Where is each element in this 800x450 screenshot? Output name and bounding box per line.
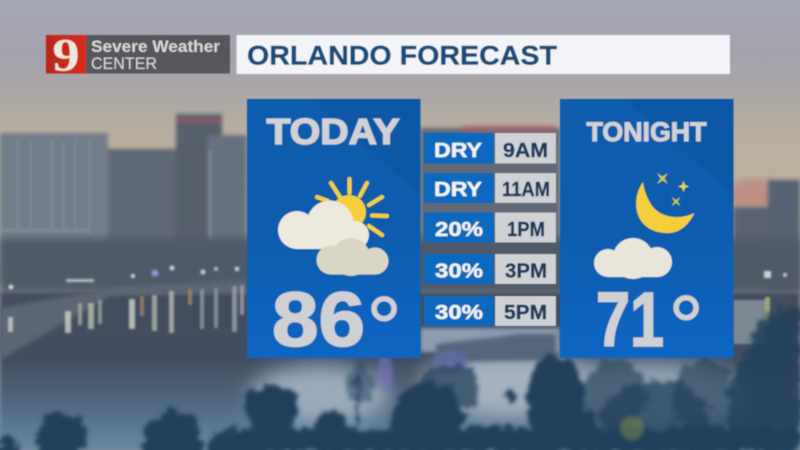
row: 5PM: 30%	[435, 301, 483, 324]
row: 5PM	[424, 296, 556, 326]
row: 11AM	[424, 173, 556, 203]
row: 3PM: 30%	[435, 260, 483, 282]
row: 3PM	[424, 254, 556, 284]
row: 9AM: DRY	[434, 139, 482, 162]
logo text	[91, 37, 220, 73]
icon: night cloud	[594, 238, 672, 279]
temperature: 86 degrees	[272, 277, 402, 377]
building window columns	[0, 140, 212, 240]
row: 9AM: 9AM	[503, 139, 548, 162]
icon: partly cloudy sun	[278, 179, 388, 276]
icon: crescent moon and stars	[636, 173, 694, 233]
row: 11AM: 11AM	[502, 178, 550, 201]
shore lights	[8, 266, 787, 290]
buildings	[0, 114, 800, 290]
temperature: 71 degrees	[596, 277, 704, 376]
row: 1PM	[424, 212, 556, 242]
row: 11AM: DRY	[434, 178, 482, 201]
row: 1PM: 20%	[435, 218, 483, 241]
row: 3PM: 3PM	[505, 260, 547, 282]
panel: tonight	[560, 99, 734, 376]
logo text: Severe Weather	[91, 37, 220, 56]
shoreline and lake	[0, 238, 800, 293]
temperature: 71 degrees: 71	[596, 277, 664, 363]
temperature: 86 degrees: 86	[272, 277, 365, 363]
row: 5PM: 5PM	[504, 301, 547, 324]
heading: today: TODAY	[266, 111, 400, 152]
row: 1PM: 1PM	[507, 218, 545, 241]
fog bands at the bottom	[250, 365, 390, 425]
channel 9 red logo: 9	[52, 30, 80, 82]
row: 9AM	[424, 133, 556, 164]
heading: tonight: TONIGHT	[586, 117, 706, 147]
temperature: 86 degrees: °	[366, 278, 402, 377]
title bar: Orlando Forecast	[236, 35, 730, 74]
panel: hourly rain chance	[424, 133, 556, 326]
panel: today	[247, 99, 420, 377]
tree silhouettes	[0, 304, 800, 450]
temperature: 71 degrees: °	[668, 277, 704, 376]
channel 9 red logo	[46, 30, 86, 82]
logo text: CENTER	[91, 54, 157, 73]
logo badge: Severe Weather Center	[46, 30, 230, 82]
light reflections on water	[8, 285, 770, 344]
title bar: Orlando Forecast: ORLANDO FORECAST	[247, 40, 558, 70]
